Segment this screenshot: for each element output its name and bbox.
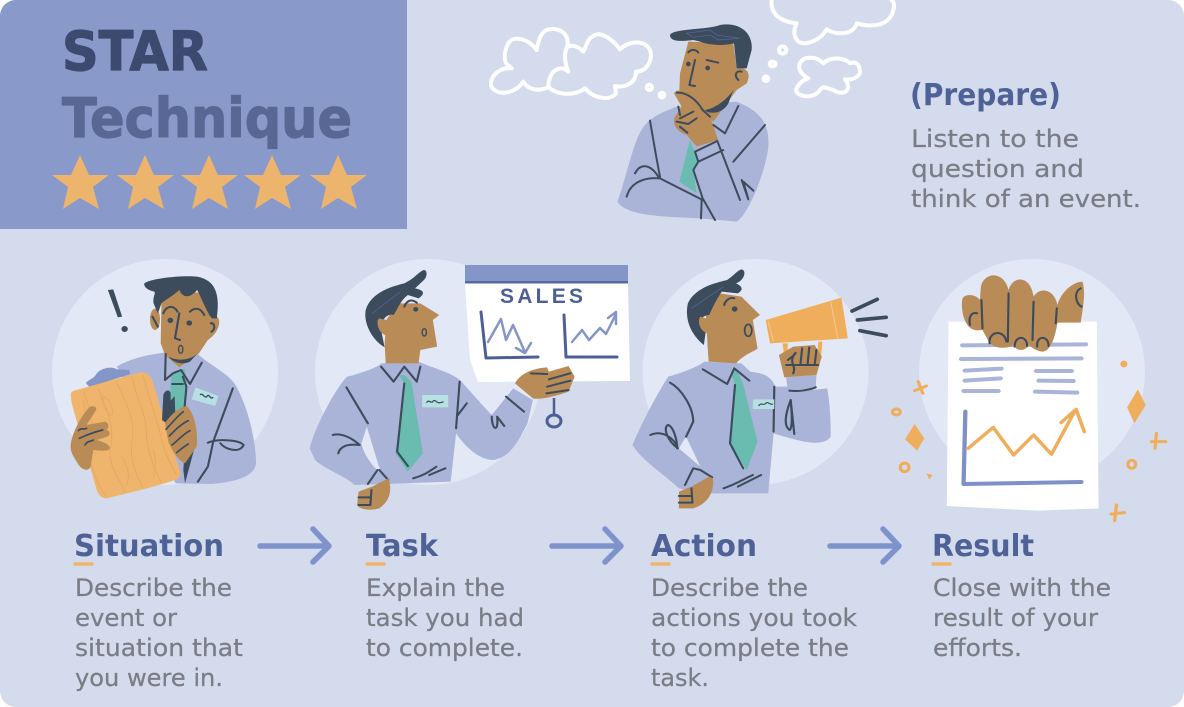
- prepare text block: question and: [911, 155, 1084, 183]
- step: Action: Action: [651, 529, 757, 564]
- step: Action: actions you took: [651, 604, 857, 632]
- arrow: situation to task: [260, 529, 329, 562]
- step: Result: result of your: [933, 604, 1098, 632]
- left hand: [71, 406, 110, 470]
- five star rating: [52, 155, 367, 209]
- step: Result: efforts.: [933, 634, 1022, 662]
- step: Task: Task: [366, 529, 439, 564]
- step: Action: to complete the: [651, 634, 849, 662]
- step: Task: [366, 529, 524, 662]
- illustration: man with megaphone: [632, 269, 886, 508]
- step: Situation: Describe the: [75, 574, 232, 602]
- clipboard: [71, 368, 200, 498]
- step: Situation: [74, 529, 243, 692]
- step: Task: task you had: [366, 604, 524, 632]
- sales board: SALES: [500, 285, 583, 308]
- step: Situation: situation that: [75, 634, 243, 662]
- step: Situation: event or: [75, 604, 177, 632]
- decorative sparkles around report: [892, 361, 1166, 521]
- step: Result: Result: [932, 529, 1034, 564]
- arrow: action to result: [830, 529, 899, 562]
- right hand: [165, 406, 197, 463]
- illustration: thinking man: [617, 24, 768, 222]
- illustration: hand holding report with upward chart: [947, 275, 1099, 511]
- prepare text block: Listen to the: [911, 125, 1079, 153]
- title panel: [0, 0, 407, 229]
- prepare text block: think of an event.: [911, 185, 1141, 213]
- step: Task: to complete.: [366, 634, 523, 662]
- step: Situation: Situation: [74, 529, 224, 564]
- title: STAR: STAR: [62, 20, 208, 83]
- step: Result: Close with the: [933, 574, 1111, 602]
- step: Result: [932, 529, 1111, 662]
- illustration: man presenting sales chart: [310, 265, 630, 510]
- sales board: [465, 265, 630, 427]
- arrow: task to action: [552, 529, 621, 562]
- prepare text block: [910, 78, 1141, 213]
- step: Action: Describe the: [651, 574, 808, 602]
- prepare text block: (Prepare): [910, 78, 1061, 113]
- illustration: man with clipboard: [71, 276, 256, 498]
- thought clouds: [491, 0, 894, 98]
- step: Task: Explain the: [366, 574, 505, 602]
- title: Technique: Technique: [62, 87, 352, 150]
- step: Action: [651, 529, 857, 692]
- background circles: [52, 259, 1145, 485]
- step: Situation: you were in.: [75, 664, 223, 692]
- step: Action: task.: [651, 664, 709, 692]
- pen: [162, 391, 175, 423]
